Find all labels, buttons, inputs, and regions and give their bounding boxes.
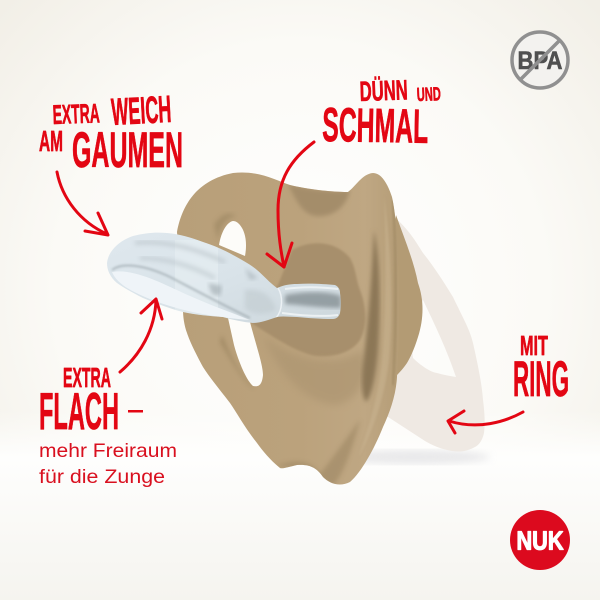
icon: BPA free badge: BPA (518, 47, 562, 75)
label: extra weich am Gaumen: AM (39, 126, 63, 158)
text: GAUMEN (72, 122, 183, 178)
pacifier shield back (380, 215, 422, 377)
hole upper (219, 221, 246, 256)
logo: NUK: NUK (516, 526, 564, 556)
label: mit Ring (513, 330, 569, 407)
label: extra weich am Gaumen: WEICH (110, 89, 172, 134)
label: extra weich am Gaumen: EXTRA (52, 98, 100, 130)
text: mehr Freiraum fuer die Zunge: für die Zunge (39, 466, 165, 488)
label: mit Ring: MIT (520, 330, 548, 361)
arrow: to shield (267, 142, 314, 267)
shield shading (214, 184, 397, 486)
nipple (107, 233, 341, 323)
arrow: to underside of nipple (120, 299, 162, 372)
label: duenn und schmal: SCHMAL (322, 99, 429, 154)
label: duenn und schmal: DÜNN (359, 74, 408, 107)
icon: BPA free badge (512, 32, 568, 88)
floor shadow (340, 450, 490, 464)
arrow: to ring (448, 411, 523, 433)
pacifier shield (177, 172, 399, 484)
pacifier ring (385, 218, 485, 452)
arrow: to top of nipple (57, 172, 108, 235)
hole lower (228, 318, 263, 386)
label: extra flach: FLACH (39, 383, 119, 441)
text: mehr Freiraum fuer die Zunge (39, 440, 177, 488)
label: duenn und schmal (322, 74, 441, 154)
label: extra flach (39, 362, 143, 441)
label: extra flach: EXTRA (63, 362, 111, 393)
label: extra weich am Gaumen (39, 89, 183, 178)
label: duenn und schmal: UND (416, 84, 441, 106)
pacifier (107, 172, 485, 486)
logo: NUK (510, 510, 570, 570)
text: mehr Freiraum fuer die Zunge: mehr Freiraum (39, 440, 177, 462)
